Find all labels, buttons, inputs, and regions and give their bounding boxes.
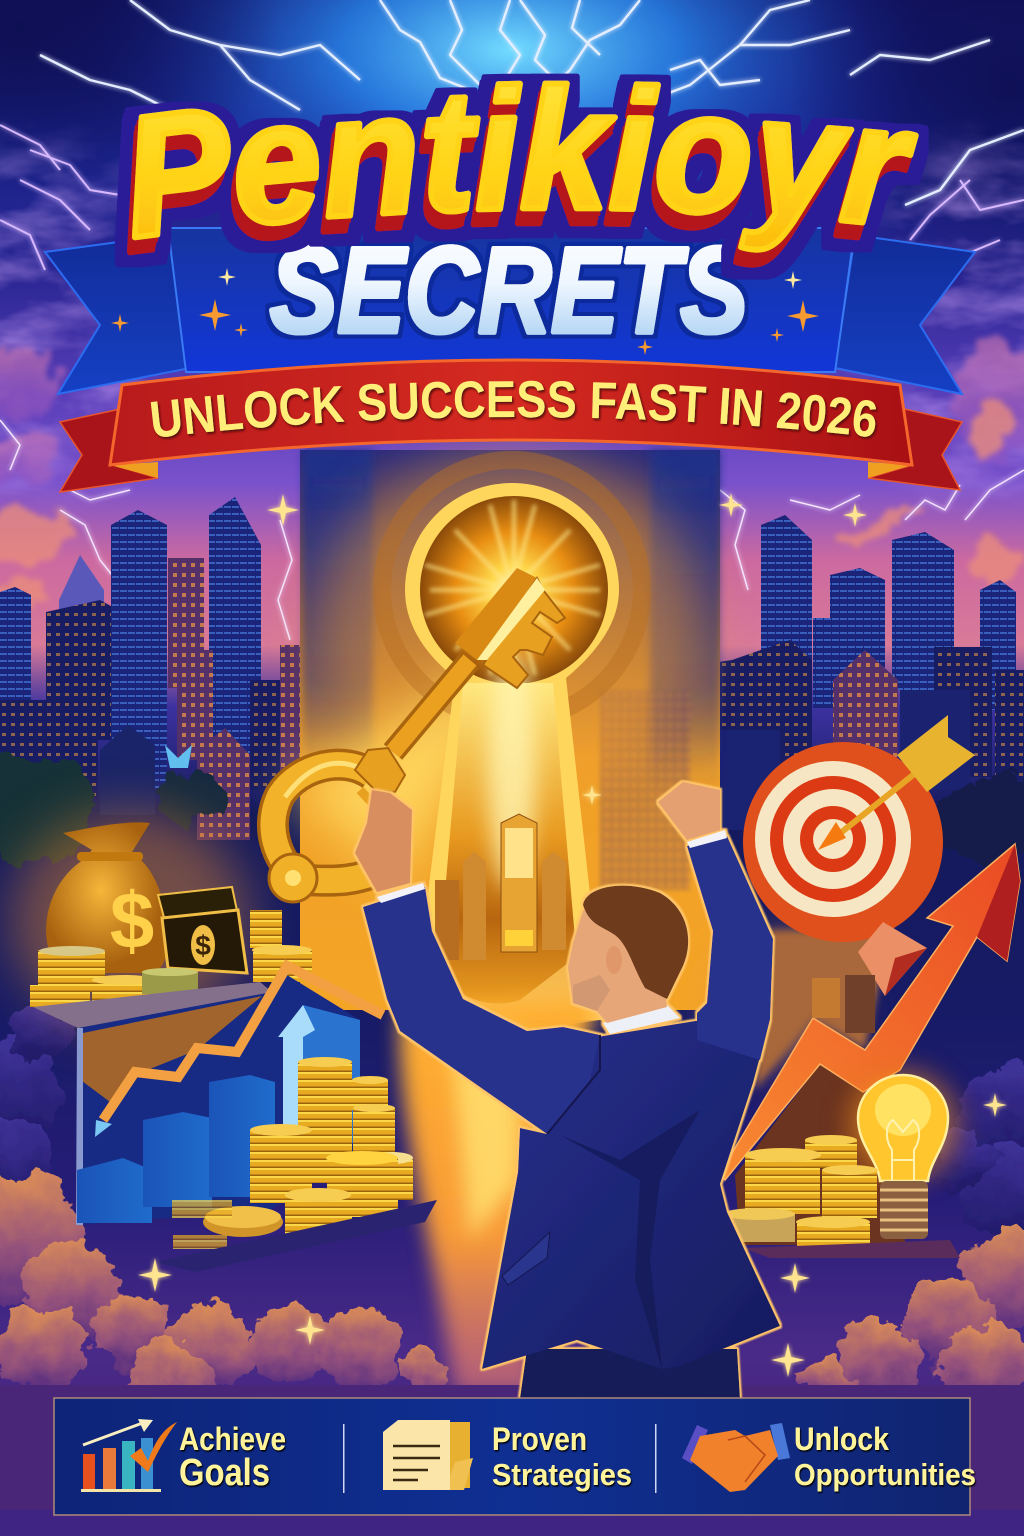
- arrow shading: [977, 844, 1020, 961]
- target: [743, 715, 975, 942]
- keyhole city: [435, 814, 566, 960]
- light beam: [400, 1000, 600, 1395]
- label: Achieve Goals: Achieve: [179, 1421, 286, 1457]
- divider left: [343, 1424, 344, 1493]
- lightbulb: [833, 1055, 973, 1239]
- icon: documents: [383, 1420, 473, 1490]
- keyhole opening: [405, 483, 619, 1020]
- coin stacks on shelf: [30, 910, 312, 1007]
- money bag: [46, 822, 168, 973]
- title: SECRETS: SECRETS: [270, 222, 748, 358]
- sparkles: [138, 493, 1007, 1377]
- golden glow: [290, 450, 840, 1060]
- red ribbon: [58, 358, 964, 493]
- raised right fist: [658, 782, 720, 840]
- chart backing panel: [77, 975, 360, 1225]
- raised left arm: [363, 887, 600, 1134]
- label: Unlock Opportunities: [794, 1421, 976, 1492]
- city skyline right: [698, 515, 1024, 865]
- feature: unlock opportunities: [682, 1421, 976, 1492]
- feature: proven strategies: [383, 1420, 632, 1492]
- shirt collar: [603, 1005, 680, 1034]
- raised right arm: [687, 836, 773, 1060]
- jaw stubble: [573, 975, 610, 1011]
- key shaft: [393, 660, 470, 752]
- raised left hand: [355, 790, 412, 892]
- right coin piles: [723, 1135, 960, 1258]
- banner centre: [168, 228, 855, 372]
- businessman: [355, 782, 780, 1398]
- ribbon text: UNLOCK SUCCESS FAST IN 2026: [150, 380, 878, 440]
- left treasure scene: [10, 810, 437, 1272]
- central towers and keyhole: [290, 450, 840, 1060]
- icon: chart with check: [81, 1419, 177, 1492]
- icon: handshake: [682, 1423, 790, 1492]
- gem and block: [812, 922, 927, 1033]
- table: [155, 1200, 437, 1272]
- hair: [583, 886, 688, 999]
- right shirt cuff: [687, 830, 727, 848]
- neck and face: [568, 905, 667, 1023]
- banner left tail: [45, 235, 190, 394]
- key coil: [269, 854, 317, 902]
- ribbon fold accents: [110, 462, 912, 478]
- backdrop behind coins: [735, 1064, 905, 1245]
- label: Unlock Opportunities: Opportunities: [794, 1457, 976, 1492]
- title: Pentikioyr: Pentikioyr: [114, 74, 929, 280]
- key ring: [273, 765, 385, 881]
- money bag: $: [110, 876, 154, 965]
- glow behind bag: [10, 810, 250, 1030]
- legs: [520, 1349, 740, 1398]
- label: Achieve Goals: Goals: [179, 1452, 270, 1494]
- label: Proven Strategies: Strategies: [492, 1457, 632, 1492]
- red growth arrow: [720, 844, 1020, 1180]
- label: Unlock Opportunities: Unlock: [794, 1421, 889, 1457]
- blue bars: [77, 1005, 360, 1223]
- ribbon right tail: [868, 408, 962, 490]
- label: Proven Strategies: [492, 1421, 632, 1492]
- key inner curve: [360, 790, 395, 850]
- key barrel: [455, 568, 537, 660]
- backdrop below target: [755, 930, 890, 1090]
- label: Achieve Goals: [179, 1421, 286, 1494]
- shoulder seam: [547, 1035, 600, 1134]
- label: Proven Strategies: Proven: [492, 1421, 587, 1457]
- jacket body: [482, 1019, 780, 1369]
- blue banner: [45, 228, 975, 394]
- ear: [606, 946, 622, 974]
- growth line: [95, 966, 383, 1137]
- right scene: [720, 715, 1020, 1258]
- jacket pocket: [502, 1232, 550, 1285]
- bills: $: [195, 930, 211, 961]
- keyhole rays: [425, 500, 600, 680]
- feature: achieve goals: [81, 1419, 286, 1494]
- ribbon left tail: [60, 408, 158, 492]
- banner stars: [111, 268, 819, 355]
- bottom feature bar: [54, 1398, 976, 1515]
- key ornaments: [355, 748, 405, 792]
- key strip: [477, 578, 545, 660]
- ribbon body: [110, 360, 912, 465]
- city skyline left: [0, 497, 304, 865]
- key: [269, 568, 565, 902]
- back folds: [560, 1060, 700, 1369]
- shelf: [33, 982, 272, 1028]
- key bit: [483, 578, 565, 688]
- clouds lower band: [0, 1000, 1024, 1536]
- left shirt cuff: [377, 883, 425, 903]
- divider right: [655, 1424, 656, 1493]
- lightning bolts: [0, 0, 1024, 640]
- bills: [158, 887, 247, 973]
- gold coin piles: [172, 1057, 413, 1249]
- arrow in target: [818, 715, 975, 850]
- banner right tail: [835, 235, 975, 394]
